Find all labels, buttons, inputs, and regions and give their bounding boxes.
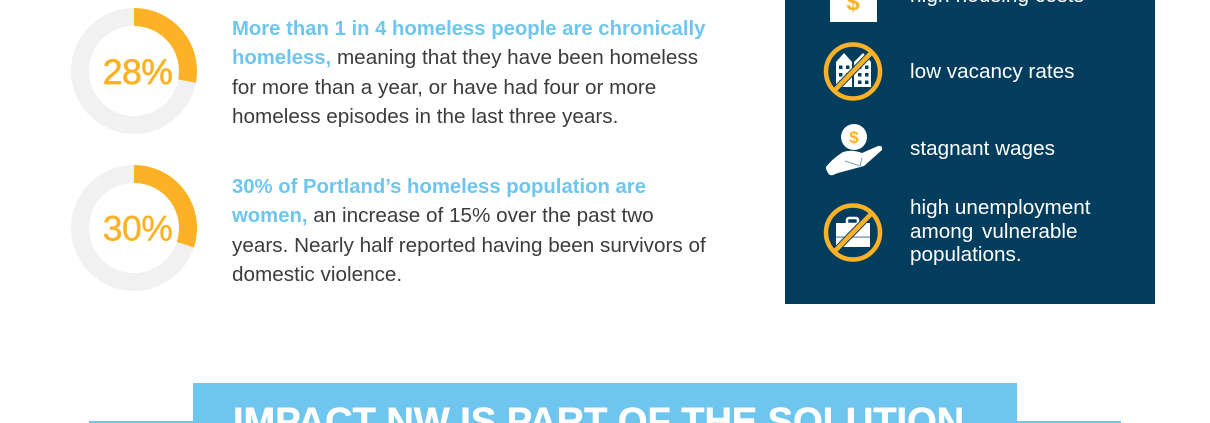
divider rule <box>89 421 1121 423</box>
text block: chronically homeless: for more than a year, or have had four or more <box>232 76 656 98</box>
donut chart: 30%: 30% <box>103 208 172 248</box>
text block: women: years. Nearly half reported having been survivors of <box>232 234 706 256</box>
text block: chronically homeless: homeless episodes in the last three years. <box>232 105 618 128</box>
label: high unemployment: among vulnerable <box>910 220 1077 242</box>
text block: chronically homeless <box>232 18 706 128</box>
text block: chronically homeless: More than 1 in 4 homeless people are chronically <box>232 18 705 40</box>
label: high unemployment: populations. <box>910 243 1022 266</box>
donut chart: 28% <box>71 8 197 134</box>
donut chart: 28%: 28% <box>103 52 172 92</box>
label: high unemployment <box>910 196 1091 266</box>
text block: women <box>232 176 706 286</box>
text block: women: domestic violence. <box>232 263 402 286</box>
icon: hand with coin <box>826 124 882 176</box>
label: stagnant wages: stagnant wages <box>910 136 1055 160</box>
text block: women: 30% of Portland’s homeless population are <box>232 176 646 198</box>
icon: hand with coin: $ <box>849 128 859 147</box>
panel: causes <box>785 0 1155 304</box>
donut chart: 30% <box>71 165 197 291</box>
icon: no buildings <box>824 42 882 101</box>
text block: chronically homeless: homeless, meaning that they have been homeless <box>232 46 698 69</box>
label: low vacancy rates: low vacancy rates <box>910 60 1074 82</box>
label: high unemployment: high unemployment <box>910 196 1091 219</box>
banner <box>193 383 1017 423</box>
text block: women: women, an increase of 15% over the past two <box>232 204 654 227</box>
icon: house with dollar <box>830 0 877 22</box>
icon: no briefcase <box>824 203 882 262</box>
